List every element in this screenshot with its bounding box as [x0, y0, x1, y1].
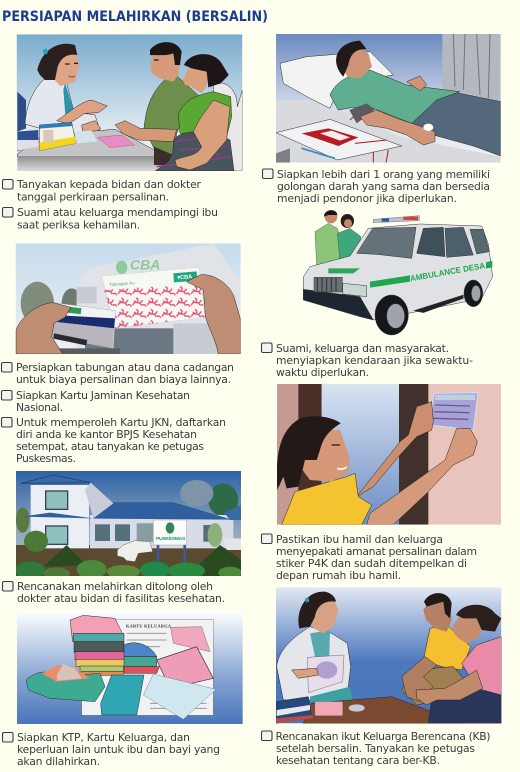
checklist: savings: Persiapkan tabungan atau dana cadangan [16, 361, 234, 374]
sticker [430, 393, 478, 430]
savings book: Tabungan Ku [109, 280, 135, 287]
checklist: family planning: kesehatan tentang cara ber-KB. [276, 754, 440, 767]
green stripe [370, 275, 410, 288]
checklist: family planning: setelah bersalin. Tanyakan ke petugas [276, 742, 475, 755]
checklist: savings [2, 361, 234, 386]
checklist: savings: untuk biaya persalinan dan biaya lainnya. [16, 373, 231, 386]
checklist: transport [262, 342, 473, 379]
pregnant wife [155, 54, 234, 171]
checklist: consultation: tanggal perkiraan persalinan. [17, 190, 169, 204]
checklist: sticker [262, 533, 477, 582]
pink folded cloth [171, 627, 210, 652]
books [276, 697, 312, 723]
pillow and bed [276, 100, 501, 163]
light bar [373, 216, 419, 223]
checklist: blood donors [262, 168, 490, 205]
panel: family planning counselling illustration [276, 587, 501, 723]
husband [402, 593, 473, 705]
panel: Puskesmas building illustration [15, 471, 242, 579]
left hand [16, 303, 71, 354]
checklist: JKN card: setempat, atau tanyakan ke petugas [16, 440, 204, 453]
illustration: village ambulance: AMBULANCE DESA [409, 260, 486, 283]
bank logo [116, 260, 160, 274]
sign: PUSKESMAS [156, 536, 186, 542]
checklist: sticker: depan rumah ibu hamil. [276, 569, 401, 582]
checklist: plan delivery: dokter atau bidan di fasilitas kesehatan. [17, 592, 225, 605]
checklist: sticker: menyepakati amanat persalinan dalam [276, 545, 477, 558]
checklist: documents [2, 731, 220, 768]
table [303, 697, 463, 723]
bushes [15, 523, 242, 579]
checklist: JKN card: Puskesmas. [16, 452, 76, 465]
doctor [25, 44, 107, 135]
health card [52, 303, 116, 348]
calendar [39, 122, 76, 151]
checklist: blood donors: golongan darah yang sama dan bersedia [277, 180, 490, 193]
checklist: plan delivery [2, 580, 225, 605]
stacked cloth [70, 615, 159, 675]
panel: P4K sticker illustration [277, 384, 501, 525]
checkbox [2, 180, 13, 189]
checklist: documents: keperluan lain untuk ibu dan bayi yang [17, 743, 220, 756]
illustration: village ambulance [303, 210, 493, 335]
checklist: documents: akan dilahirkan. [17, 755, 100, 768]
savings book: ▾CBA [176, 274, 193, 281]
checklist: sticker: Pastikan ibu hamil dan keluarga [276, 533, 443, 546]
checklist: JKN card [2, 416, 226, 465]
checklist: JKN card: diri anda ke kantor BPJS Kesehatan [16, 428, 197, 441]
sign [153, 520, 187, 563]
checklist: national health card: Nasional. [16, 401, 63, 414]
tissue box [315, 702, 343, 716]
teal folded cloth [101, 675, 144, 715]
checklist: sticker: stiker P4K dan sudah ditempelkan di [276, 557, 467, 570]
husband [115, 42, 199, 165]
checklist: husband accompanies: saat periksa kehamilan. [17, 218, 140, 232]
desk [17, 129, 161, 157]
couple [315, 210, 361, 266]
checklist: blood donors: Siapkan lebih dari 1 orang yang memiliki [277, 168, 490, 181]
checklist: transport: waktu diperlukan. [276, 366, 369, 379]
checklist: transport: Suami, keluarga dan masyarakat. [276, 342, 449, 355]
panel: consultation with midwife illustration [17, 34, 242, 171]
health worker [277, 592, 353, 702]
health center building [21, 475, 241, 548]
blood bag tray [276, 114, 402, 163]
woman [277, 402, 477, 525]
title: PERSIAPAN MELAHIRKAN (BERSALIN) [2, 9, 268, 25]
donor man [330, 41, 501, 156]
panel: savings and health card illustration [16, 243, 241, 354]
curtain [442, 34, 501, 102]
car [117, 541, 153, 562]
checklist: family planning [262, 730, 490, 767]
checklist: husband accompanies [2, 206, 218, 232]
checklist: national health card: Siapkan Kartu Jaminan Kesehatan [16, 389, 190, 402]
checklist: blood donors: menjadi pendonor jika diperlukan. [277, 192, 457, 205]
car body [303, 224, 493, 335]
checklist: plan delivery: Rencanakan melahirkan ditolong oleh [17, 580, 213, 593]
checklist: JKN card: Untuk memperoleh Kartu JKN, daftarkan [16, 416, 226, 429]
checklist: consultation [2, 178, 202, 204]
right hand [187, 275, 241, 354]
checklist: national health card [2, 389, 190, 414]
family card document: KARTU KELUARGA [126, 623, 172, 628]
checklist: transport: menyiapkan kendaraan jika sewaktu- [276, 354, 473, 367]
checklist: husband accompanies: Suami atau keluarga mendampingi ibu [17, 206, 218, 219]
ID card [143, 674, 216, 719]
savings book [102, 267, 205, 328]
checklist: family planning: Rencanakan ikut Keluarga Berencana (KB) [276, 730, 490, 743]
family card document [82, 619, 213, 715]
panel: blood donor illustration [276, 34, 501, 163]
green towel [26, 672, 105, 702]
checklist: documents: Siapkan KTP, Kartu Keluarga, dan [17, 731, 190, 744]
bank logo: CBA [130, 256, 160, 272]
wife [416, 605, 501, 723]
text: Tanyakan kepada bidan dan dokter [16, 178, 202, 191]
panel: documents and baby supplies illustration [17, 611, 243, 724]
